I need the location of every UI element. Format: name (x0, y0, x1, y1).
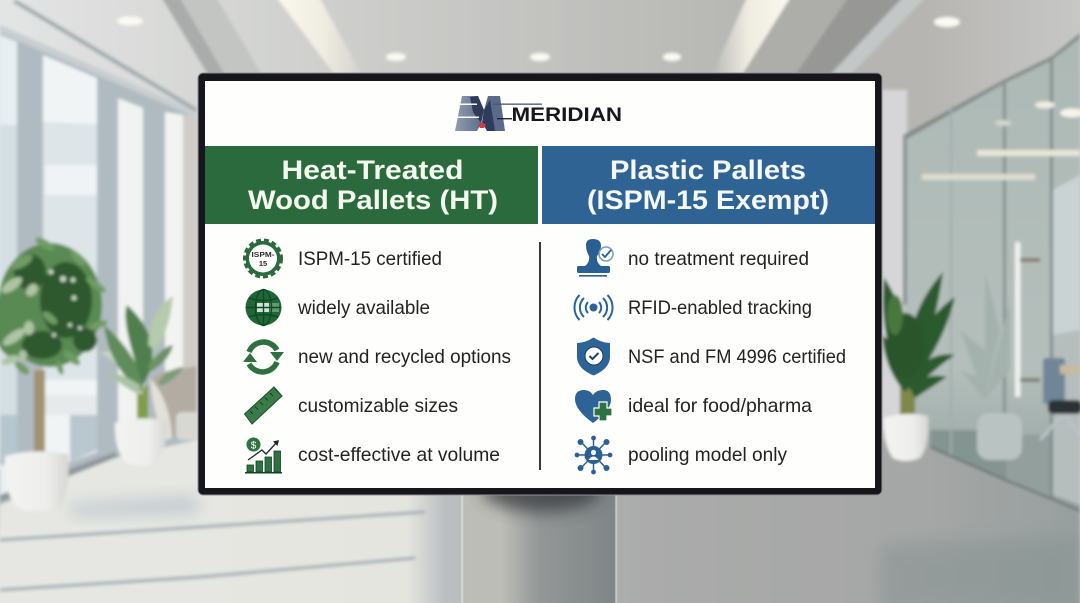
text: new and recycled options: new and recycled options (298, 346, 511, 368)
logo: Meridian (455, 96, 622, 131)
text: customizable sizes: customizable sizes (298, 395, 458, 417)
floor tint near pots (70, 497, 197, 515)
column divider (539, 242, 541, 470)
left pot (5, 451, 69, 511)
floor right shading (880, 535, 1080, 603)
monitor bezel (198, 73, 882, 495)
floor (0, 440, 1080, 603)
text: cost-effective at volume: cost-effective at volume (298, 444, 500, 466)
icon: ISPM-15 seal: ISPM- (252, 250, 275, 259)
header: heat-treated wood pallets: Wood Pallets (HT) (248, 185, 498, 215)
light strips on ceiling (160, 0, 928, 75)
header: heat-treated wood pallets: Heat-Treated (282, 155, 464, 185)
header: plastic pallets: Plastic Pallets (610, 155, 806, 185)
right pot (884, 414, 928, 461)
text: widely available: widely available (297, 297, 430, 319)
text: NSF and FM 4996 certified: NSF and FM 4996 certified (628, 346, 846, 368)
display monitor (198, 73, 882, 495)
icon: cost chart: $ (251, 440, 257, 452)
header: plastic pallets (542, 146, 875, 224)
sofa (150, 366, 200, 440)
text: RFID-enabled tracking: RFID-enabled tracking (628, 297, 812, 319)
icon: RFID signal (574, 295, 613, 320)
right column list (574, 239, 846, 474)
text: ideal for food/pharma: ideal for food/pharma (628, 395, 812, 417)
icon: ISPM-15 seal (244, 240, 282, 277)
icon: pooling network (575, 436, 612, 474)
left tree (0, 235, 109, 452)
display stand (462, 468, 617, 603)
right plant (882, 272, 955, 416)
ceiling (0, 0, 1080, 470)
text: pooling model only: pooling model only (628, 444, 787, 466)
header: plastic pallets: (ISPM-15 Exempt) (587, 185, 829, 215)
icon: shield check (577, 338, 610, 376)
text: ISPM-15 certified: ISPM-15 certified (298, 248, 442, 270)
icon: ISPM-15 seal: 15 (259, 259, 267, 268)
logo wordmark: MERIDIAN (512, 105, 622, 126)
ceiling lights (117, 16, 960, 61)
text: no treatment required: no treatment required (628, 248, 809, 270)
icon: ruler (244, 387, 282, 424)
icon: heart with cross (575, 390, 612, 423)
icon: recycle arrows (243, 342, 284, 372)
second pot (115, 418, 167, 466)
second plant (100, 296, 184, 420)
white screen (205, 81, 875, 488)
left column list (243, 240, 511, 474)
icon: cost chart (245, 438, 282, 474)
icon: globe (246, 290, 282, 326)
right wall and glass partition (882, 33, 1080, 516)
chair behind glass (1040, 358, 1080, 440)
header: heat-treated wood pallets (205, 146, 538, 224)
left window wall (0, 0, 197, 505)
floor reflections (0, 512, 425, 590)
icon: stamp with check (577, 239, 613, 277)
